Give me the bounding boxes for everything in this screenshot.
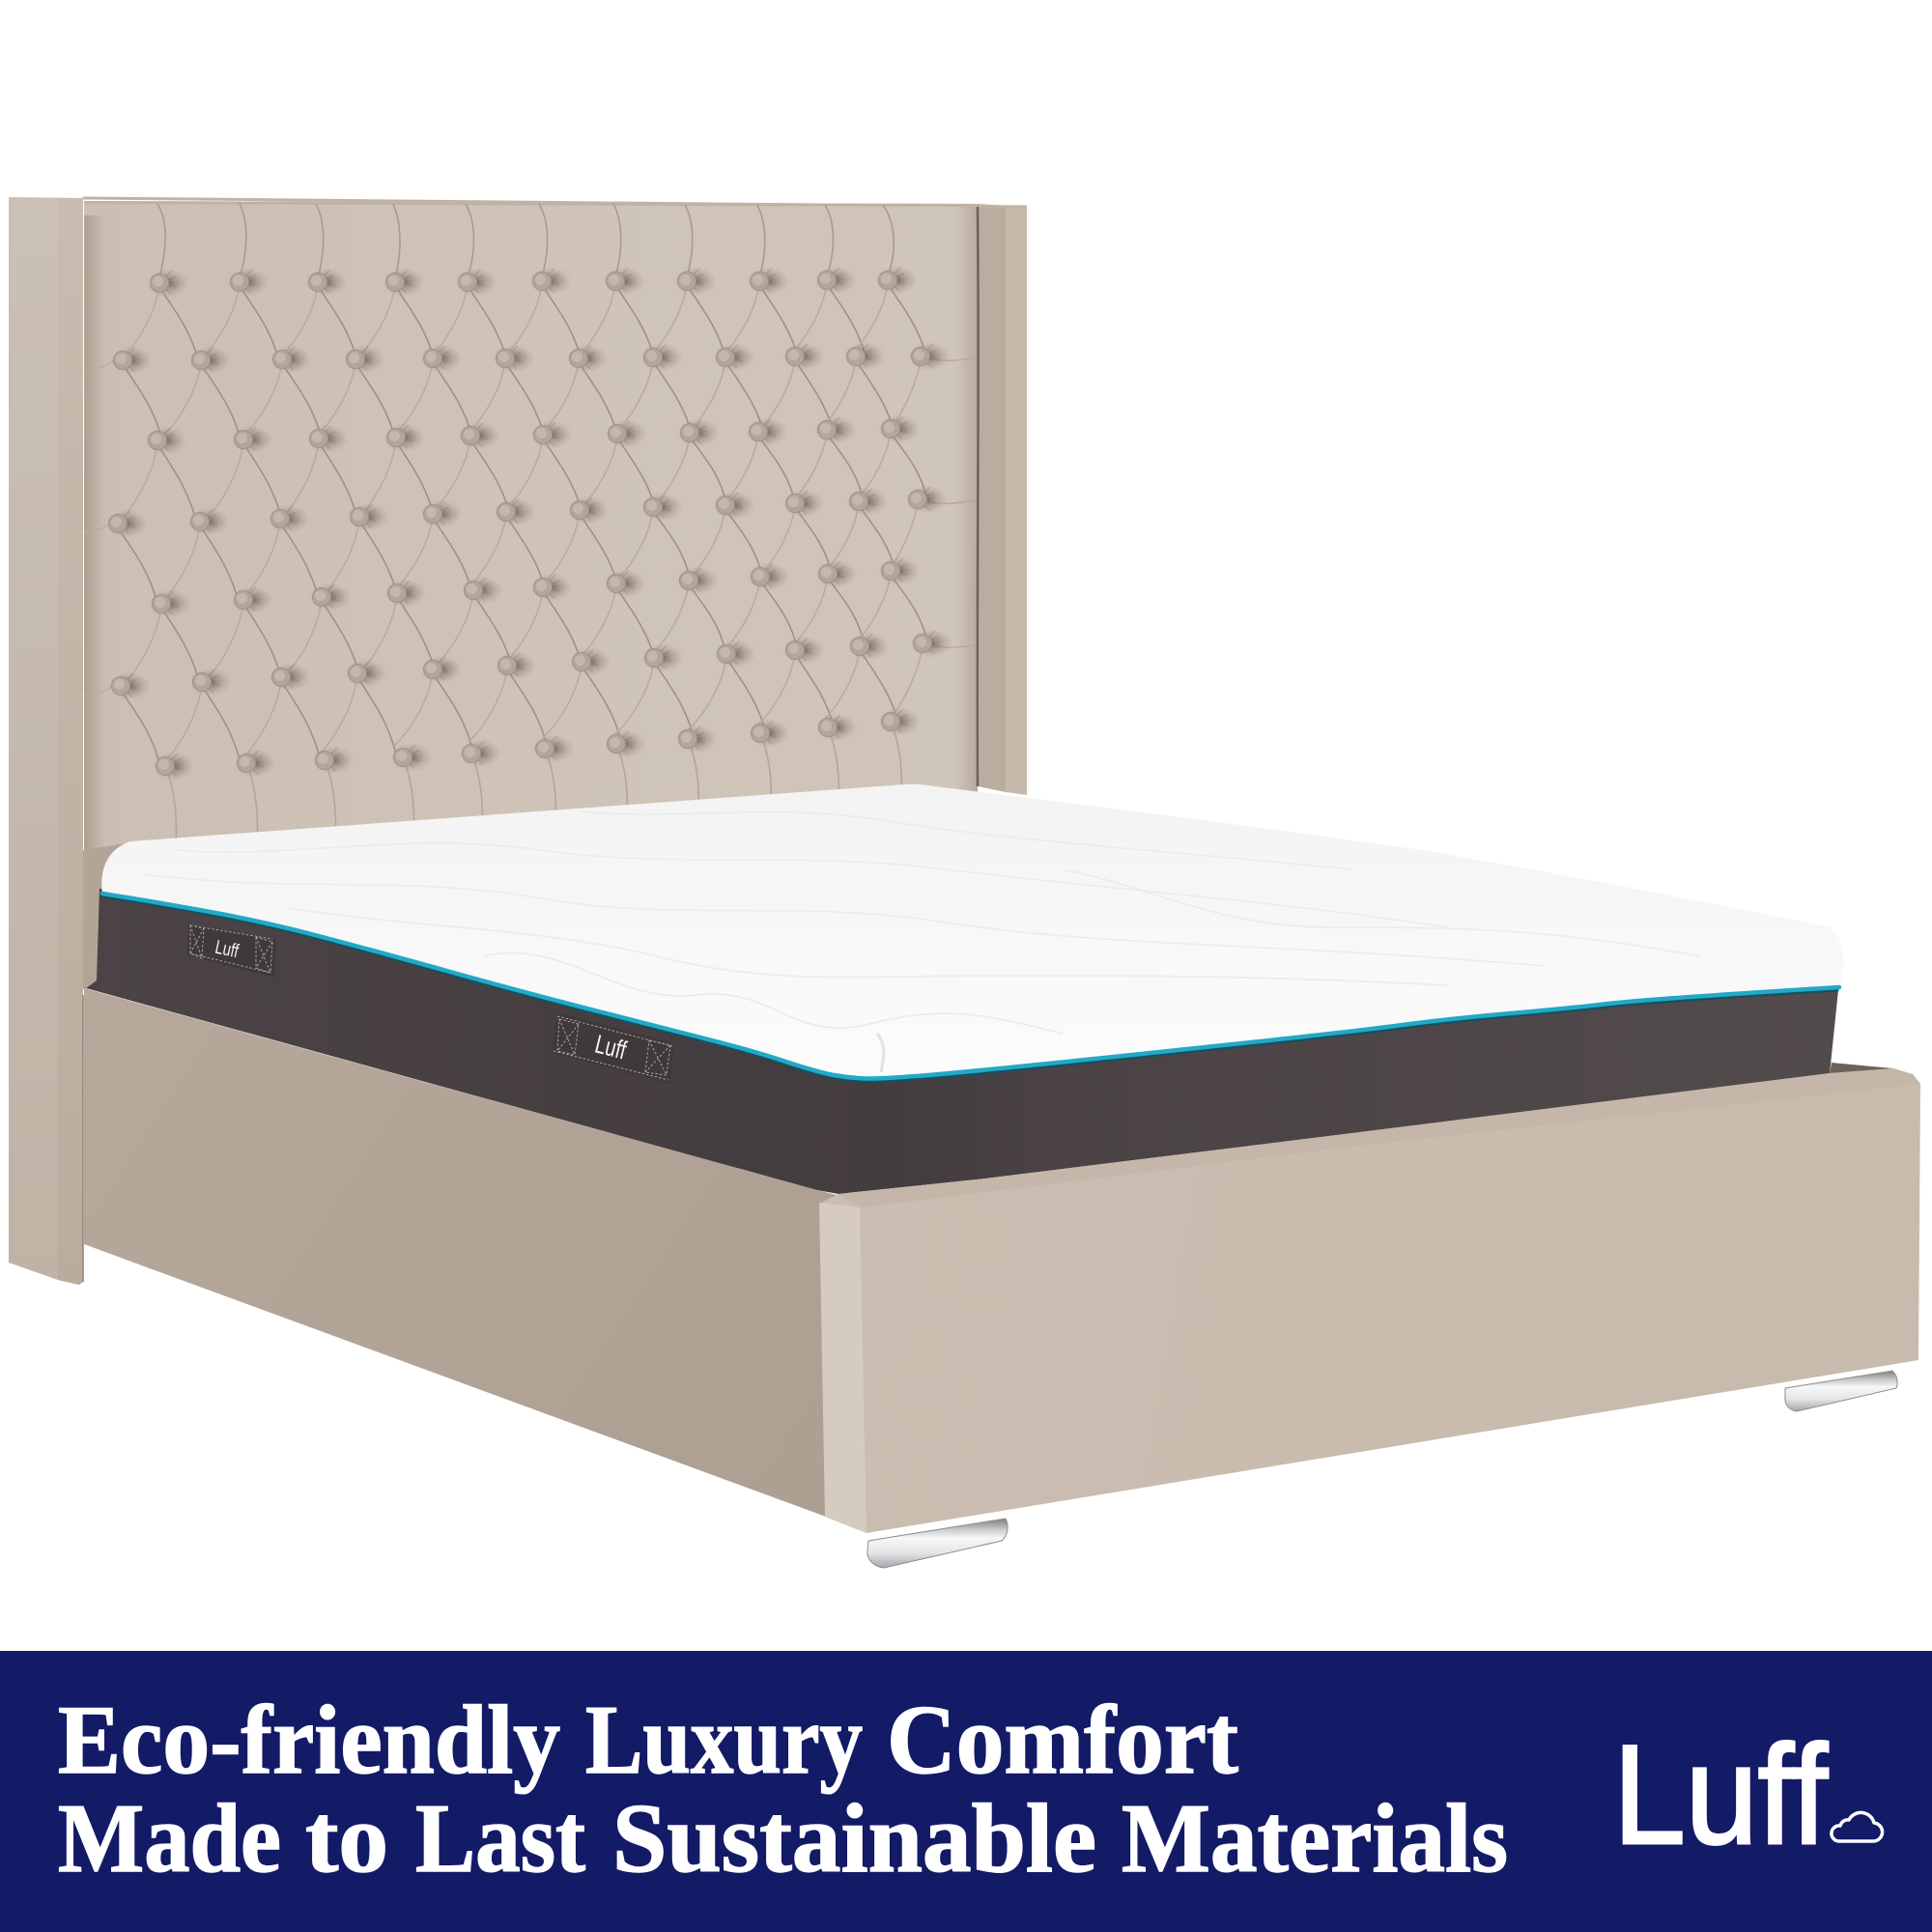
bed base: side rail	[84, 988, 840, 1517]
chrome foot: front	[867, 1519, 1008, 1568]
headline line 1: Comfort	[887, 1686, 1238, 1795]
icon: cloud	[1832, 1812, 1883, 1841]
headline line 1: Eco-friendly	[58, 1686, 560, 1795]
tufting row 4	[79, 485, 976, 603]
tufted panel	[79, 198, 980, 872]
foot rail top strip	[838, 1068, 1920, 1208]
mattress top cover	[101, 784, 1843, 1079]
brand logo	[1613, 1716, 1883, 1873]
headline line 2: Materials	[1122, 1784, 1508, 1893]
rear rim at foot rail corner	[1830, 1063, 1893, 1074]
mattress handle tag: front	[552, 1012, 674, 1084]
teal piping	[102, 894, 1839, 1082]
headline line 2: Sustainable	[612, 1784, 1096, 1893]
right wing of headboard	[978, 204, 1027, 795]
mattress side fabric	[86, 889, 1839, 1194]
panel seam against right wing	[977, 207, 980, 786]
headline line 2: Made	[58, 1784, 281, 1893]
headline line 1: Luxury	[585, 1686, 863, 1795]
foot rail corner strip	[819, 1203, 867, 1533]
filler behind mattress	[83, 843, 126, 989]
headline line 1	[58, 1686, 1238, 1795]
mattress handle tag: left: Luff	[213, 937, 241, 962]
mattress handle tag: front: Luff	[592, 1030, 630, 1065]
mattress handle tag: left	[186, 924, 276, 978]
vertical pleats above the top row	[157, 204, 894, 278]
tufting row 7	[156, 709, 918, 838]
tufting row 6	[82, 629, 980, 763]
tufting row 3	[119, 414, 927, 522]
left wing of headboard	[9, 197, 1027, 1285]
logo wordmark: Luff	[1613, 1716, 1828, 1873]
tufting row 1	[121, 266, 926, 359]
foot rail face	[821, 1068, 1920, 1533]
headline line 2: Last	[415, 1784, 585, 1893]
headline line 2: to	[305, 1784, 388, 1893]
tufting row 5	[123, 556, 927, 685]
headline line 2	[58, 1784, 1508, 1893]
chrome foot: right	[1785, 1371, 1897, 1411]
bed base: foot rail	[819, 1063, 1920, 1533]
quilting pattern on mattress top	[145, 811, 1700, 1072]
bed: upholstered headboard	[9, 197, 1027, 1285]
tufting row 2	[84, 342, 979, 438]
mattress	[86, 784, 1843, 1194]
banner background	[0, 1651, 1932, 1932]
